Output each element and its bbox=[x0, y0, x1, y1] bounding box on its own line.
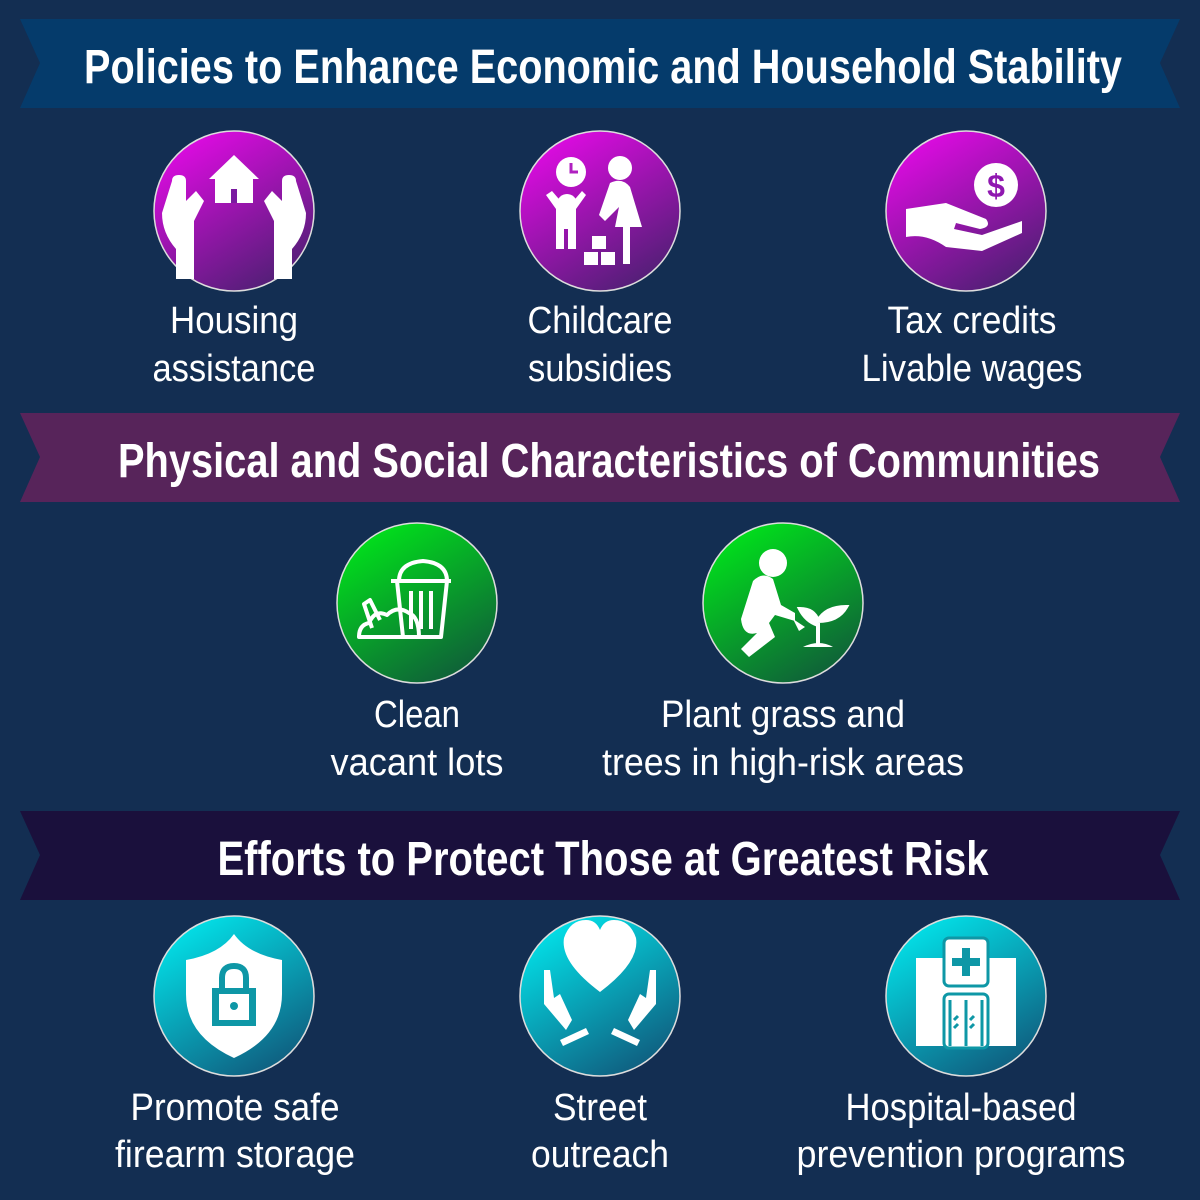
icon: tax credits: $ bbox=[987, 168, 1005, 204]
icon: tax credits bbox=[886, 131, 1046, 291]
icon: hospital bbox=[886, 916, 1046, 1076]
label: hospital programs: Hospital-based bbox=[846, 1087, 1076, 1129]
label: plant grass: Plant grass and bbox=[661, 694, 905, 736]
label: firearm storage: Promote safe bbox=[130, 1087, 340, 1129]
icon: childcare bbox=[520, 131, 680, 291]
label: clean vacant lots: vacant lots bbox=[330, 742, 504, 784]
label: housing: assistance bbox=[152, 348, 316, 390]
label: childcare: Childcare bbox=[528, 300, 672, 342]
icon: planting bbox=[703, 523, 863, 683]
label: clean vacant lots bbox=[330, 694, 504, 784]
label: housing bbox=[152, 300, 316, 390]
label: plant grass: trees in high-risk areas bbox=[602, 742, 964, 784]
label: hospital programs bbox=[796, 1087, 1126, 1176]
icon: clean lots bbox=[337, 523, 497, 683]
icon: heart hands bbox=[520, 916, 680, 1076]
label: hospital programs: prevention programs bbox=[796, 1134, 1126, 1176]
icon: shield lock bbox=[154, 916, 314, 1076]
label: tax credits: Tax credits bbox=[888, 300, 1056, 342]
banner: communities bbox=[20, 413, 1180, 502]
label: tax credits bbox=[862, 300, 1082, 390]
label: childcare: subsidies bbox=[528, 348, 672, 390]
label: housing: Housing bbox=[170, 300, 298, 342]
label: firearm storage: firearm storage bbox=[115, 1134, 355, 1176]
label: firearm storage bbox=[115, 1087, 355, 1176]
banner: economic stability bbox=[20, 19, 1180, 108]
icon: housing assistance bbox=[154, 131, 314, 291]
label: childcare bbox=[528, 300, 672, 390]
banner: protect at risk: Efforts to Protect Those at Greatest Risk bbox=[218, 833, 989, 886]
label: street outreach bbox=[531, 1087, 669, 1176]
label: street outreach: outreach bbox=[531, 1134, 669, 1176]
banner: protect at risk bbox=[20, 811, 1180, 900]
label: plant grass bbox=[602, 694, 964, 784]
label: street outreach: Street bbox=[553, 1087, 647, 1129]
label: clean vacant lots: Clean bbox=[374, 694, 460, 736]
label: tax credits: Livable wages bbox=[862, 348, 1082, 390]
